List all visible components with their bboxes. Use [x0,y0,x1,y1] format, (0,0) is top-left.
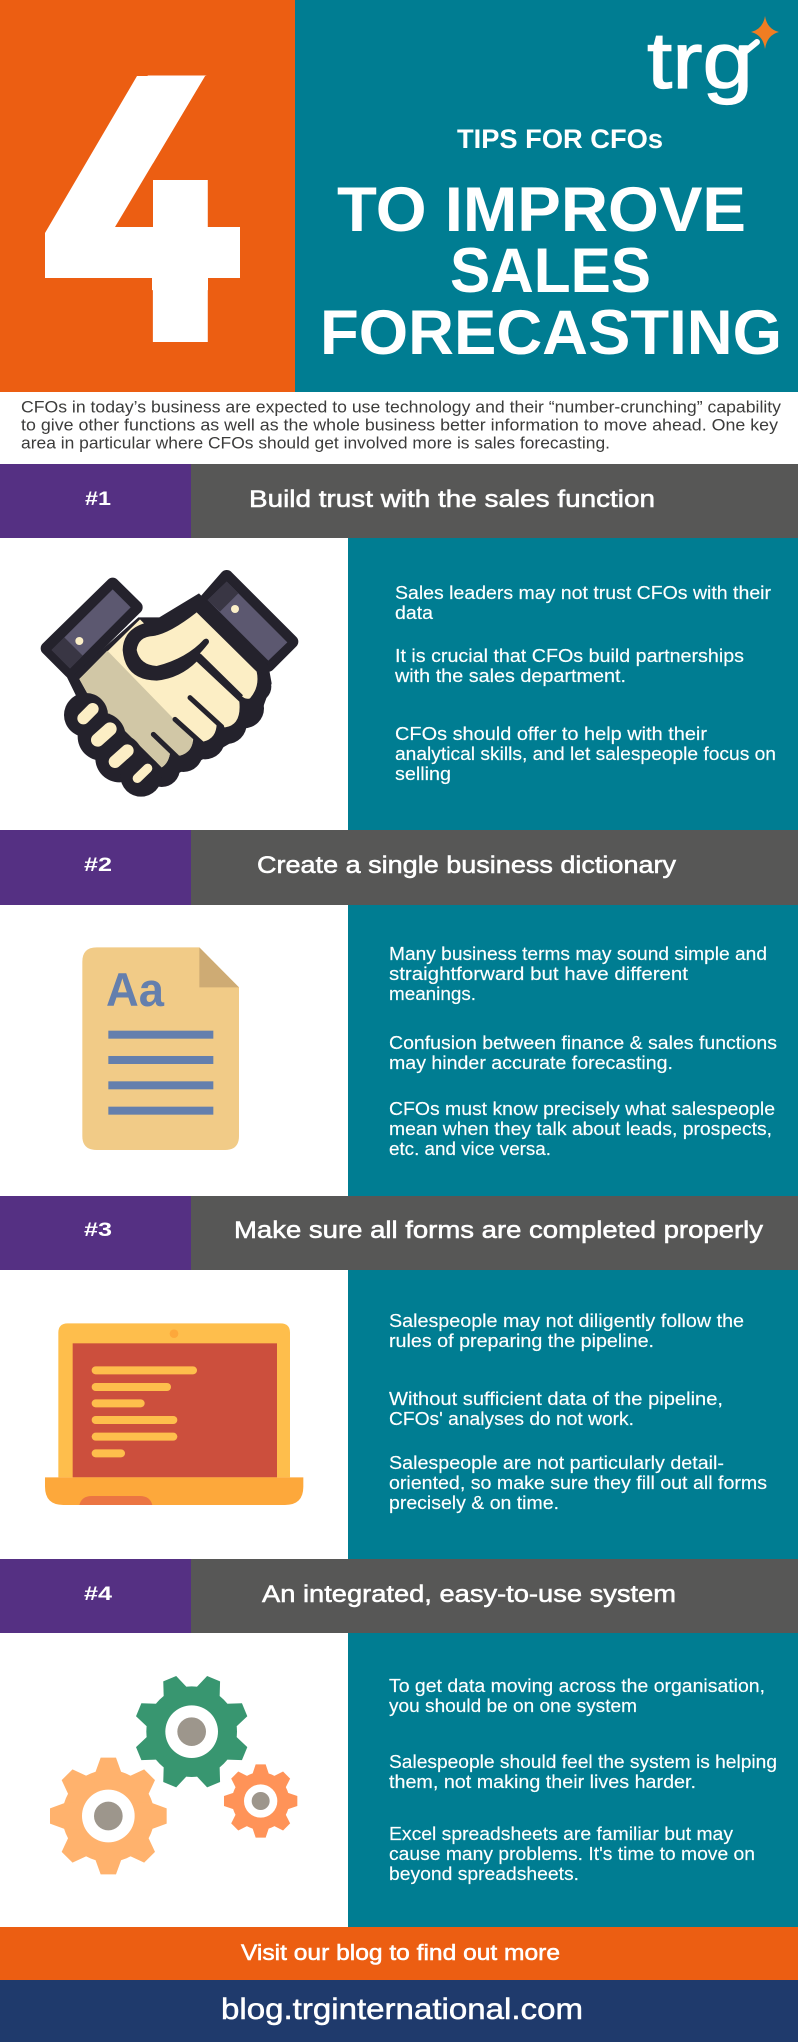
icon: gears [50,1657,297,1874]
tip 1 header band [0,464,798,538]
big number 4: 4 [48,2,237,415]
tip 1 panel [47,538,798,830]
tip 1 text: CFOs should offer to help with their [395,723,707,744]
footer url: blog.trginternational.com [221,1993,583,2026]
logo: trg: trg [647,16,753,105]
tip 2 text: may hinder accurate forecasting. [389,1052,673,1073]
tip 3 text [389,1310,767,1513]
tip 3 text: Without sufficient data of the pipeline, [389,1388,723,1409]
title: SALES [450,236,651,306]
intro text: area in particular where CFOs should get involved more is sales forecasting. [21,434,610,452]
intro text [21,398,782,452]
tip 4 text [389,1675,777,1884]
tip 4 text: To get data moving across the organisation, [389,1675,765,1696]
tip 3 text: Salespeople may not diligently follow the [389,1310,744,1331]
tip 3 header band [0,1196,798,1270]
tip 3 panel [45,1270,798,1559]
icon: handshake [47,577,292,797]
intro text: to give other functions as well as the whole business better information to move ahead. One key [21,416,779,434]
tip 3 text: oriented, so make sure they fill out all forms [389,1472,767,1493]
tip 2 text: meanings. [389,983,476,1004]
icon: dictionary document: Aa [106,963,165,1016]
tip 1 text: It is crucial that CFOs build partnerships [395,645,744,666]
tip 3 text: CFOs' analyses do not work. [389,1408,634,1429]
header panel [0,0,798,415]
tip 4 heading: An integrated, easy-to-use system [262,1581,676,1608]
tip 4 text: cause many problems. It's time to move on [389,1843,755,1864]
title: TO IMPROVE [337,175,746,245]
tip 2 heading: Create a single business dictionary [257,852,676,879]
tip 1 text: selling [395,763,451,784]
tip 2 panel [82,905,798,1196]
tip 4 text: Salespeople should feel the system is helping [389,1751,777,1772]
icon: dictionary document [82,947,239,1150]
tip 1 number: #1 [85,489,112,510]
tip 2 text: CFOs must know precisely what salespeople [389,1098,775,1119]
tip 3 heading: Make sure all forms are completed properly [234,1217,763,1244]
intro text: CFOs in today’s business are expected to use technology and their “number-crunching” capability [21,398,782,416]
tip 2 text: Many business terms may sound simple and [389,943,767,964]
tip 1 text: Sales leaders may not trust CFOs with their [395,582,771,603]
footer call to action [0,1927,798,1980]
tip 1 text: data [395,602,434,623]
tip 1 heading: Build trust with the sales function [249,486,655,513]
tip 4 text: you should be on one system [389,1695,637,1716]
tip 2 text: straightforward but have different [389,963,688,984]
tip 4 header band [0,1559,798,1633]
footer url [0,1980,798,2042]
tip 4 number: #4 [84,1584,113,1605]
title: FORECASTING [320,298,782,368]
tip 4 text: Excel spreadsheets are familiar but may [389,1823,734,1844]
tip 2 text: mean when they talk about leads, prospects, [389,1118,772,1139]
tip 4 text: beyond spreadsheets. [389,1863,579,1884]
tip 2 number: #2 [84,855,112,876]
tip 2 text [389,943,777,1159]
tip 3 number: #3 [84,1220,112,1241]
tip 2 header band [0,830,798,905]
tip 3 text: rules of preparing the pipeline. [389,1330,654,1351]
tip 4 panel [50,1633,798,1927]
tip 1 text [394,582,776,784]
subtitle: TIPS FOR CFOs [457,124,663,154]
tip 3 text: Salespeople are not particularly detail- [389,1452,724,1473]
tip 4 text: them, not making their lives harder. [389,1771,696,1792]
tip 2 text: Confusion between finance & sales functions [389,1032,777,1053]
tip 2 text: etc. and vice versa. [389,1138,551,1159]
footer call to action: Visit our blog to find out more [241,1940,560,1965]
tip 1 text: with the sales department. [394,665,626,686]
tip 1 text: analytical skills, and let salespeople focus on [395,743,776,764]
tip 3 text: precisely & on time. [389,1492,559,1513]
icon: laptop [45,1323,303,1505]
title [320,175,782,368]
